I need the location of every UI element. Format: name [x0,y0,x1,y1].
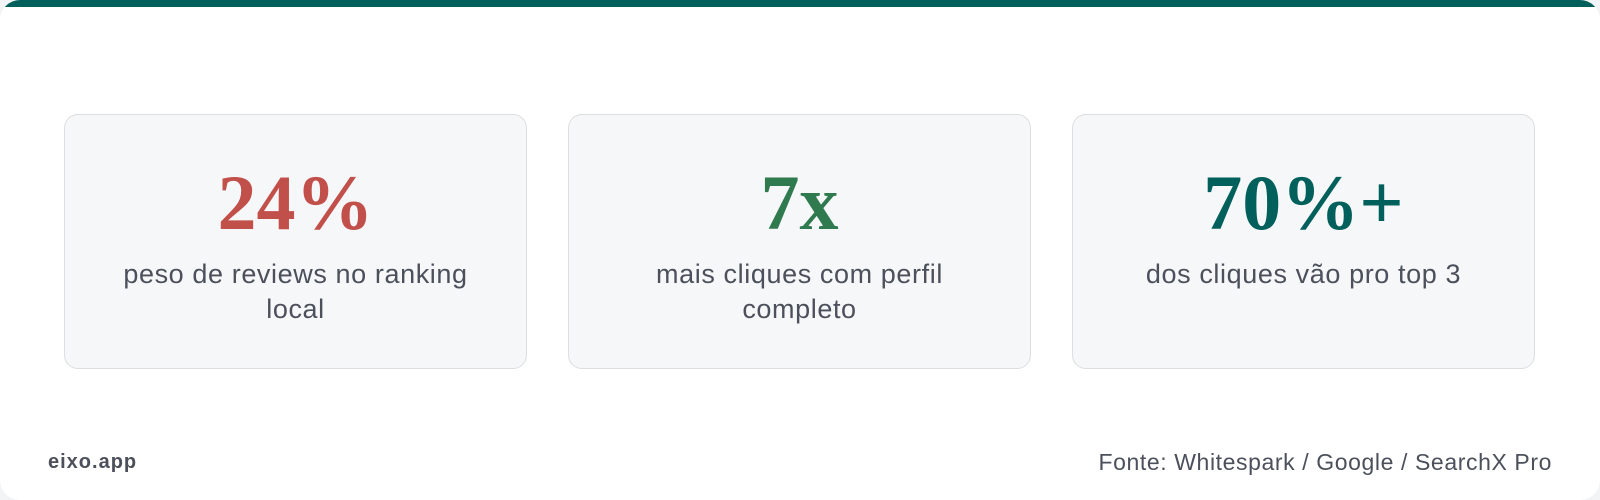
panel: 24% [64,114,527,369]
number: 70%+: 70%+ [1203,159,1404,246]
label: mais cliques: mais cliques com perfil completo [656,259,943,324]
label: peso de reviews: peso de reviews no ranking local [123,259,468,324]
panel: 70%+ [1072,114,1535,369]
number: 24%: 24% [218,159,374,246]
footer brand: eixo.app [48,451,137,473]
number: 7x: 7x [760,159,838,246]
panel: 7x [568,114,1031,369]
footer source: Fonte: Whitespark / Google / SearchX Pro [1098,449,1552,475]
label: dos cliques: dos cliques vão pro top 3 [1146,259,1461,289]
